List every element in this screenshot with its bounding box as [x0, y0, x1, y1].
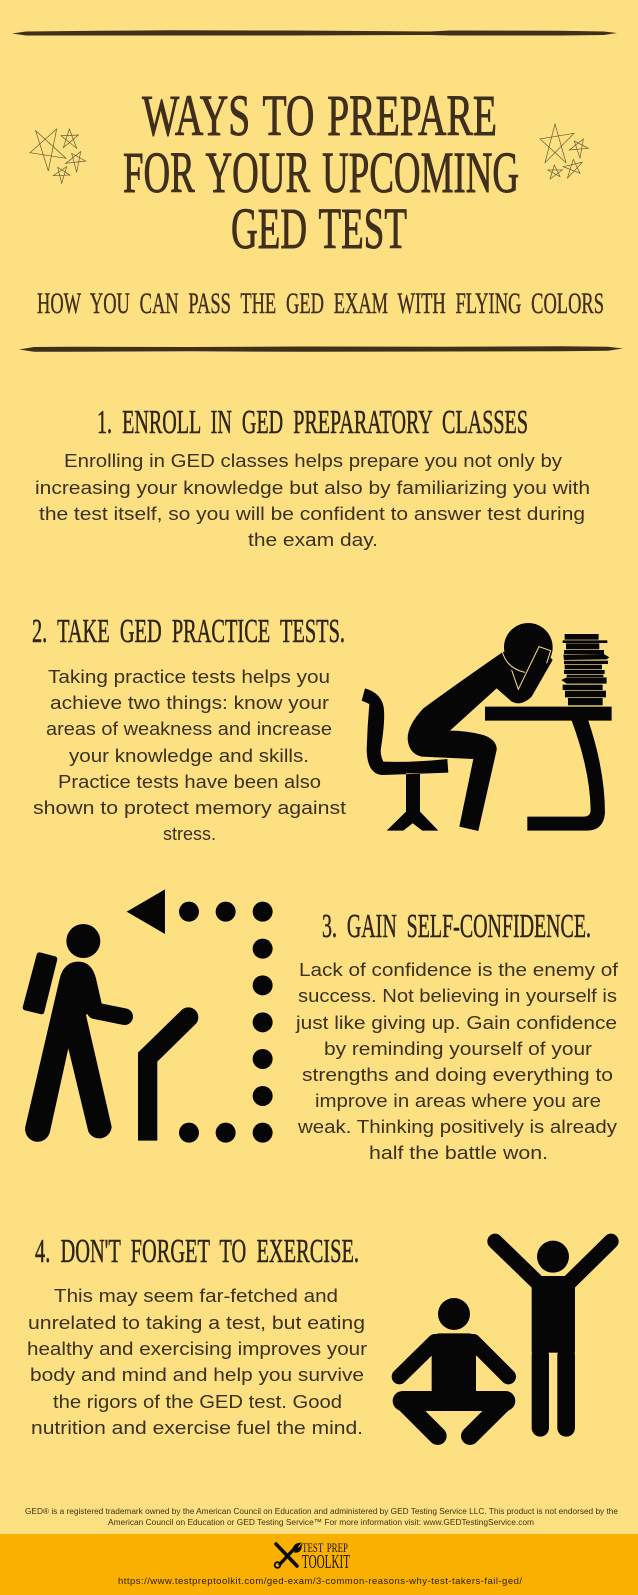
icon: two exercising figures: [399, 1241, 611, 1437]
text block 2: stress.: [163, 823, 216, 844]
icon: logo tools: [275, 1544, 301, 1568]
text block 3: half the battle won.: [369, 1142, 548, 1163]
top brush divider: [12, 30, 617, 36]
text block 3: Lack of confidence is the enemy of: [299, 959, 619, 980]
text block 4: healthy and exercising improves your: [27, 1338, 367, 1359]
text block 2: achieve two things: know your: [50, 692, 329, 713]
text block 2: Taking practice tests helps you: [48, 666, 330, 687]
text block 1: the exam day.: [248, 529, 378, 550]
panel: section 3: [25, 889, 619, 1163]
footer band: [0, 1534, 638, 1595]
text block 1: [35, 450, 590, 550]
icon: stars right: [540, 124, 588, 179]
hiker: [25, 924, 125, 1142]
text block 4: This may seem far-fetched and: [54, 1285, 338, 1306]
panel: section 2: [32, 613, 612, 844]
text block 2: shown to protect memory against: [33, 797, 347, 818]
text block 1: increasing your knowledge but also by familiarizing you with: [35, 477, 590, 498]
chair: [362, 688, 448, 831]
logo text: TOOLKIT: [302, 1551, 350, 1573]
text block 3: weak. Thinking positively is already: [297, 1116, 618, 1137]
text block 3: success. Not believing in yourself is: [298, 985, 617, 1006]
icon: hiker and dotted path: [25, 889, 273, 1143]
icon: stars left: [30, 129, 86, 183]
icon: stressed student at desk: [362, 623, 612, 831]
text block 4: nutrition and exercise fuel the mind.: [31, 1417, 363, 1438]
text block 2: [33, 666, 347, 844]
text block 3: strengths and doing everything to: [302, 1064, 613, 1085]
text block 4: [27, 1285, 367, 1438]
walking stick: [138, 1007, 198, 1141]
disclaimer note: [25, 1506, 618, 1527]
squatting figure: [399, 1298, 508, 1436]
title: GED TEST: [231, 196, 407, 261]
book stack: [561, 634, 609, 705]
text block 3: [295, 959, 619, 1163]
text block 1: Enrolling in GED classes helps prepare you not only by: [64, 450, 563, 471]
logo text: [302, 1540, 350, 1573]
text block 4: body and mind and help you survive: [30, 1364, 364, 1385]
desk: [485, 707, 612, 831]
disclaimer note: GED® is a registered trademark owned by the American Council on Education and administered by GED Testing Service LLC. This product is not endorsed by the: [25, 1506, 618, 1516]
disclaimer note: American Council on Education or GED Testing Service™ For more information visit: www.GEDTestingService.com: [108, 1517, 534, 1527]
text block 3: just like giving up. Gain confidence: [295, 1012, 617, 1033]
text block 1: the test itself, so you will be confident to answer test during: [39, 503, 585, 524]
arrow: [127, 889, 165, 934]
panel: section 4: [27, 1233, 611, 1438]
heading 2: 2. TAKE GED PRACTICE TESTS.: [32, 613, 345, 650]
standing figure: [495, 1241, 611, 1437]
logo text: TEST PREP: [302, 1540, 348, 1555]
text block 2: Practice tests have been also: [58, 771, 321, 792]
text block 3: by reminding yourself of your: [324, 1038, 592, 1059]
text block 4: unrelated to taking a test, but eating: [28, 1312, 365, 1333]
title: [123, 83, 519, 261]
text block 4: the rigors of the GED test. Good: [53, 1391, 342, 1412]
panel: section 1: [35, 404, 590, 550]
source url: https://www.testpreptoolkit.com/ged-exam/3-common-reasons-why-test-takers-fail-ged/: [118, 1576, 522, 1587]
heading 4: 4. DON'T FORGET TO EXERCISE.: [35, 1233, 359, 1270]
text block 2: your knowledge and skills.: [69, 745, 309, 766]
text block 3: improve in areas where you are: [315, 1090, 601, 1111]
dotted path: [179, 902, 273, 1143]
text block 2: areas of weakness and increase: [46, 718, 332, 739]
lower brush divider: [19, 346, 623, 352]
person: [408, 645, 553, 831]
